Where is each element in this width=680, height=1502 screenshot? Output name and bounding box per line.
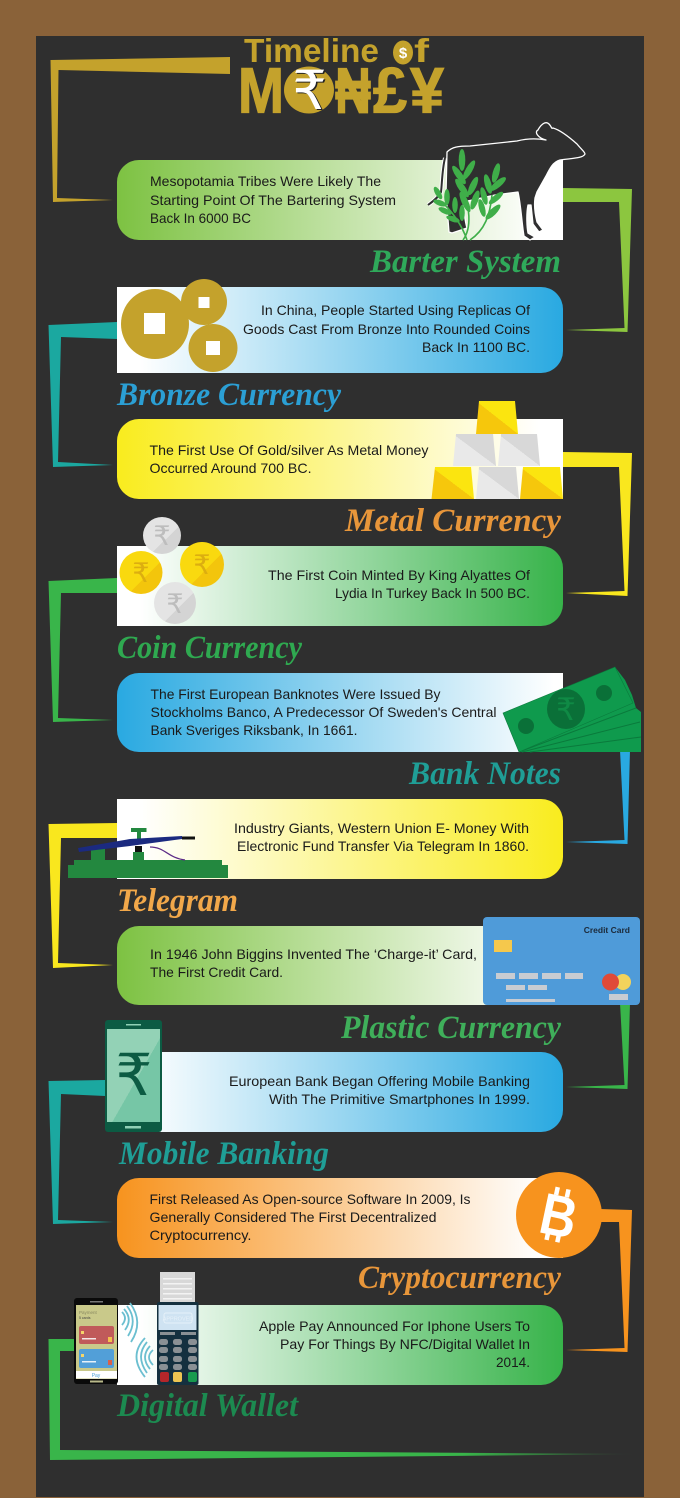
connector: plastic to mobile <box>566 1003 630 1089</box>
title coin: o with dollar: $ <box>399 45 408 62</box>
icon: smartphone wallet: 5 cards <box>79 1316 91 1320</box>
title: ₦ <box>335 54 371 126</box>
icon: card payment terminal <box>157 1272 198 1385</box>
panel: barter system <box>117 123 585 240</box>
icon: phone with rupee <box>105 1020 162 1132</box>
panel: bank notes <box>117 667 641 752</box>
heading: telegram: Telegram <box>117 883 238 919</box>
panel: digital wallet <box>74 1272 563 1385</box>
text: bank notes: The First European Banknotes Were Issued By <box>150 686 440 702</box>
text: crypto: Cryptocurrency. <box>150 1227 252 1243</box>
text: bank notes: Stockholms Banco, A Predecessor Of Sweden's Central <box>150 704 496 720</box>
icon: phone with rupee: ₹ <box>116 1043 152 1108</box>
text: barter <box>150 173 396 226</box>
text: digital wallet: 2014. <box>496 1354 530 1370</box>
title coin: O with rupee <box>284 61 334 122</box>
text: digital wallet: Pay For Things By NFC/Digital Wallet In <box>280 1336 530 1352</box>
title: Timeline <box>244 32 379 69</box>
icon: plant <box>432 149 508 240</box>
connector: mobile to crypto <box>48 1080 113 1224</box>
text: crypto: Generally Considered The First Decentralized <box>150 1209 436 1225</box>
icon: banknotes: ₹ <box>556 692 576 727</box>
panel: metal currency <box>117 401 563 499</box>
icon: smartphone wallet <box>74 1298 118 1384</box>
icon: rupee coins: ₹ <box>166 589 184 619</box>
connector: coin to bank notes <box>48 578 117 722</box>
heading: bank notes: Bank Notes <box>408 756 561 792</box>
text: mobile <box>229 1073 530 1107</box>
icon: rupee coins: ₹ <box>132 558 150 588</box>
icon: card payment terminal: APPROVED <box>163 1316 193 1322</box>
text: metal: Occurred Around 700 BC. <box>150 460 312 476</box>
title coin: O with rupee: ₹ <box>294 62 328 122</box>
connector: barter to bronze <box>563 188 632 332</box>
title: M <box>238 54 284 126</box>
text: bronze: In China, People Started Using Replicas Of <box>261 302 530 318</box>
panel: telegram <box>68 799 563 879</box>
icon: smartphone wallet: Payment <box>79 1310 98 1315</box>
heading: barter system: Barter System <box>369 244 561 280</box>
heading: plastic currency: Plastic Currency <box>340 1010 561 1046</box>
heading: metal currency: Metal Currency <box>344 503 561 539</box>
icon: smartphone wallet: Pay <box>92 1373 101 1379</box>
connector: digital wallet to bottom <box>48 1339 640 1460</box>
heading: coin currency: Coin Currency <box>117 630 302 666</box>
text: mobile: European Bank Began Offering Mobile Banking <box>229 1073 530 1089</box>
text: crypto <box>150 1191 470 1243</box>
text: plastic: The First Credit Card. <box>150 964 283 980</box>
text: digital wallet <box>259 1318 530 1370</box>
icon: gold and silver bars <box>432 401 563 499</box>
title <box>238 32 444 126</box>
text: telegram <box>234 820 529 854</box>
panel: mobile banking <box>105 1020 563 1132</box>
icon: bitcoin <box>516 1172 602 1258</box>
panel: bronze currency <box>117 279 563 373</box>
icon: rupee coins <box>120 517 224 624</box>
text: digital wallet: Apple Pay Announced For Iphone Users To <box>259 1318 530 1334</box>
text: coin <box>268 567 530 601</box>
title: £ <box>373 54 407 126</box>
icon: rupee coins: ₹ <box>193 550 211 580</box>
icon: telegraph key <box>68 828 228 878</box>
connector: telegram to plastic <box>48 823 117 968</box>
text: plastic <box>150 946 477 980</box>
title: ¥ <box>410 54 444 126</box>
icon: banknotes <box>503 667 641 752</box>
text: bronze: Goods Cast From Bronze Into Rounded Coins <box>243 321 530 337</box>
title coin: o with dollar <box>393 40 413 64</box>
text: barter: Starting Point Of The Bartering System <box>150 192 396 208</box>
heading: bronze currency: Bronze Currency <box>116 377 341 413</box>
text: coin: Lydia In Turkey Back In 500 BC. <box>335 585 530 601</box>
text: bronze <box>243 302 530 355</box>
text: metal <box>150 442 428 476</box>
heading: mobile banking: Mobile Banking <box>118 1136 329 1172</box>
title: f <box>414 32 430 69</box>
icon: bronze coins <box>121 279 238 372</box>
text: plastic: In 1946 John Biggins Invented The ‘Charge-it’ Card, <box>150 946 477 962</box>
connector: bronze to metal <box>48 322 117 467</box>
icon: credit card: Credit Card <box>584 925 630 935</box>
icon: bitcoin: B <box>534 1181 583 1252</box>
text: barter: Back In 6000 BC <box>150 210 251 226</box>
text: barter: Mesopotamia Tribes Were Likely The <box>150 173 381 189</box>
text: coin: The First Coin Minted By King Alyattes Of <box>268 567 530 583</box>
panel: cryptocurrency <box>117 1172 602 1258</box>
text: telegram: Electronic Fund Transfer Via Telegram In 1860. <box>237 838 529 854</box>
text: metal: The First Use Of Gold/silver As Metal Money <box>150 442 428 458</box>
icon: credit card <box>483 917 640 1005</box>
title coin: O with rupee: ₹ <box>292 61 327 121</box>
panel: plastic currency <box>117 917 640 1005</box>
text: bank notes: Bank Sveriges Riksbank, In 1661. <box>150 722 358 738</box>
text: crypto: First Released As Open-source Software In 2009, Is <box>150 1191 470 1207</box>
connector: crypto to digital wallet <box>566 1209 632 1352</box>
text: telegram: Industry Giants, Western Union E- Money With <box>234 820 529 836</box>
icon: nfc waves <box>122 1303 153 1377</box>
panel: coin currency <box>117 517 563 626</box>
text: bank notes <box>150 686 496 738</box>
connector: metal to coin <box>563 452 632 596</box>
connector: title to barter <box>50 57 230 202</box>
heading: digital wallet: Digital Wallet <box>116 1388 299 1424</box>
text: bronze: Back In 1100 BC. <box>422 339 530 355</box>
connector: bank notes to telegram <box>566 750 630 844</box>
icon: rupee coins: ₹ <box>153 521 171 551</box>
icon: cow <box>428 123 585 240</box>
text: mobile: With The Primitive Smartphones In 1999. <box>269 1091 530 1107</box>
heading: cryptocurrency: Cryptocurrency <box>358 1260 561 1296</box>
